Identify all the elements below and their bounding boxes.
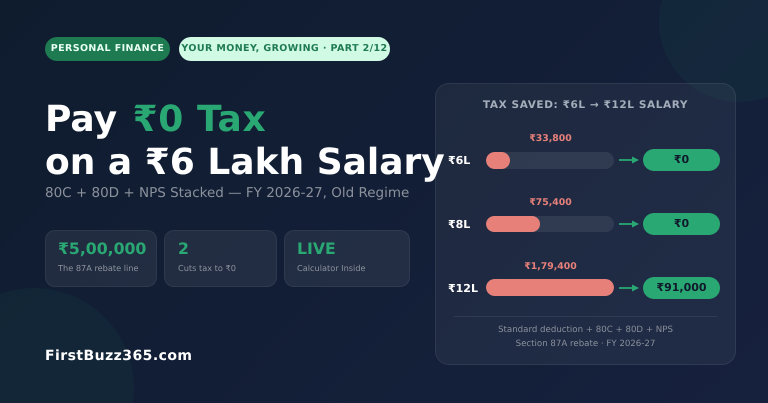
subtitle: 80C + 80D + NPS Stacked — FY 2026-27, Old Regime [45,185,409,201]
badge: series [179,37,390,61]
stat card: live calculator [284,230,410,287]
row: 12L: ₹1,79,400 [524,261,577,272]
stat card: rebate line: ₹5,00,000 [58,239,146,258]
row: 12L: ₹12L [448,282,478,294]
title [45,99,445,183]
decorative circle: top right [659,0,768,102]
panel footnote [498,325,673,349]
badge: series: YOUR MONEY, GROWING · PART 2/12 [181,43,388,54]
row: 12L: ₹91,000 [656,281,707,294]
stat card: rebate line: The 87A rebate line [58,263,139,273]
row: 8L: ₹75,400 [529,197,572,208]
panel footnote: Section 87A rebate · FY 2026-27 [516,339,655,349]
badge: personal finance [45,37,170,61]
row: 6L: ₹33,800 [529,133,572,144]
stat card: live calculator: Calculator Inside [297,263,366,273]
panel: tax saved [435,83,736,365]
panel footnote: Standard deduction + 80C + 80D + NPS [498,325,673,335]
panel heading: TAX SAVED: ₹6L → ₹12L SALARY [483,99,688,111]
badge: personal finance: PERSONAL FINANCE [51,43,164,54]
title: on a ₹6 Lakh Salary [45,142,445,183]
row: 8L: ₹0 [674,217,689,230]
row: 8L [448,197,720,235]
stat card: live calculator: LIVE [297,239,336,258]
stat card: cuts tax: Cuts tax to ₹0 [178,263,236,273]
stat card: rebate line [45,230,157,287]
row: 8L: ₹8L [448,218,470,230]
stat card: cuts tax: 2 [178,239,189,258]
stat card: cuts tax [164,230,277,287]
brand footer: FirstBuzz365.com [45,348,192,364]
title: Pay ₹0 Tax [45,99,266,140]
row: 6L: ₹0 [674,153,689,166]
row: 6L [448,133,720,171]
row: 6L: ₹6L [448,154,470,166]
row: 12L [448,261,720,299]
decorative circle: bottom left [0,288,134,403]
